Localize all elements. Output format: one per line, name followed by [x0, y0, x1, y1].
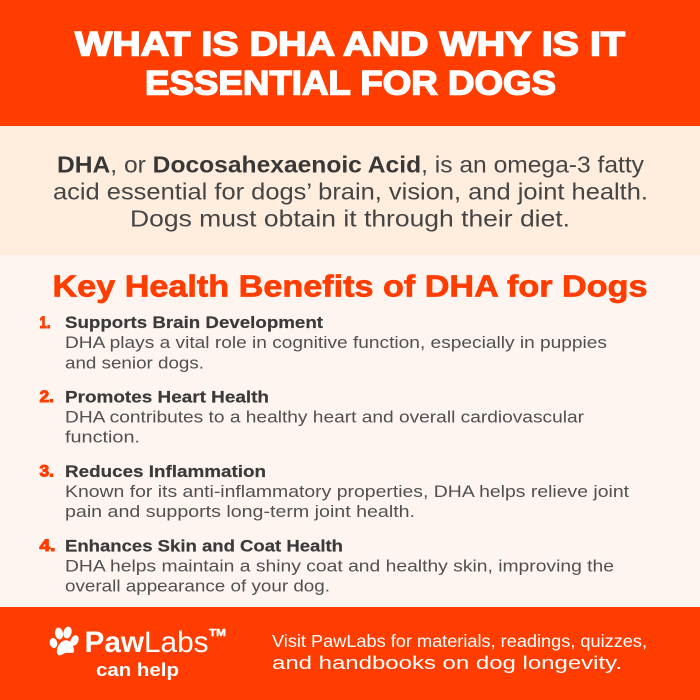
benefit 2: heart health: 2. [40, 388, 54, 406]
benefit 2: heart health: Promotes Heart Health [65, 388, 269, 406]
benefit 4: skin and coat: 4. [40, 537, 56, 555]
intro text [53, 152, 648, 232]
benefit 4: skin and coat [40, 536, 614, 596]
benefit 4: skin and coat: Enhances Skin and Coat Health [65, 536, 343, 556]
benefit 1: brain development: Supports Brain Development [65, 313, 323, 332]
logo wordmark: PawLabs [84, 626, 208, 659]
logo tagline: can help [96, 659, 179, 680]
benefit 1: brain development: and senior dogs. [65, 354, 204, 372]
benefit 3: inflammation: pain and supports long-term joint health. [65, 502, 415, 521]
intro text: Dogs must obtain it through their diet. [130, 206, 570, 232]
benefit 3: inflammation: Known for its anti-inflammatory properties, DHA helps relieve joint [65, 482, 629, 501]
benefit 1: brain development [40, 313, 607, 372]
panel: intro definition [0, 126, 700, 255]
benefit 1: brain development: DHA plays a vital role in cognitive function, especially in puppies [65, 333, 607, 352]
benefit 3: inflammation [40, 462, 629, 521]
benefit 4: skin and coat: DHA helps maintain a shiny coat and healthy skin, improving the [65, 556, 614, 576]
intro text: acid essential for dogs’ brain, vision, and joint health. [53, 178, 648, 204]
benefit 3: inflammation: Reduces Inflammation [65, 462, 266, 481]
logo trademark: TM [209, 628, 226, 639]
panel: footer [0, 607, 700, 700]
title [75, 26, 625, 102]
benefit 2: heart health [40, 388, 584, 446]
panel: key health benefits [0, 255, 700, 607]
call to action [272, 631, 647, 673]
intro text: DHA, or Docosahexaenoic Acid , is an omega-3 fatty [57, 152, 645, 178]
benefit 1: brain development: 1. [40, 314, 50, 332]
benefit 2: heart health: DHA contributes to a healthy heart and overall cardiovascular [65, 408, 584, 426]
icon: paw print [49, 626, 80, 655]
heading: Key Health Benefits of DHA for Dogs [52, 270, 648, 304]
panel: header [0, 0, 700, 126]
call to action: and handbooks on dog longevity. [272, 652, 622, 673]
call to action: Visit PawLabs for materials, readings, quizzes, [272, 631, 647, 651]
title: WHAT IS DHA AND WHY IS IT [75, 26, 625, 64]
benefit 3: inflammation: 3. [40, 462, 54, 480]
benefit 4: skin and coat: overall appearance of your dog. [65, 576, 330, 596]
benefit 2: heart health: function. [65, 428, 140, 446]
title: ESSENTIAL FOR DOGS [145, 64, 556, 102]
